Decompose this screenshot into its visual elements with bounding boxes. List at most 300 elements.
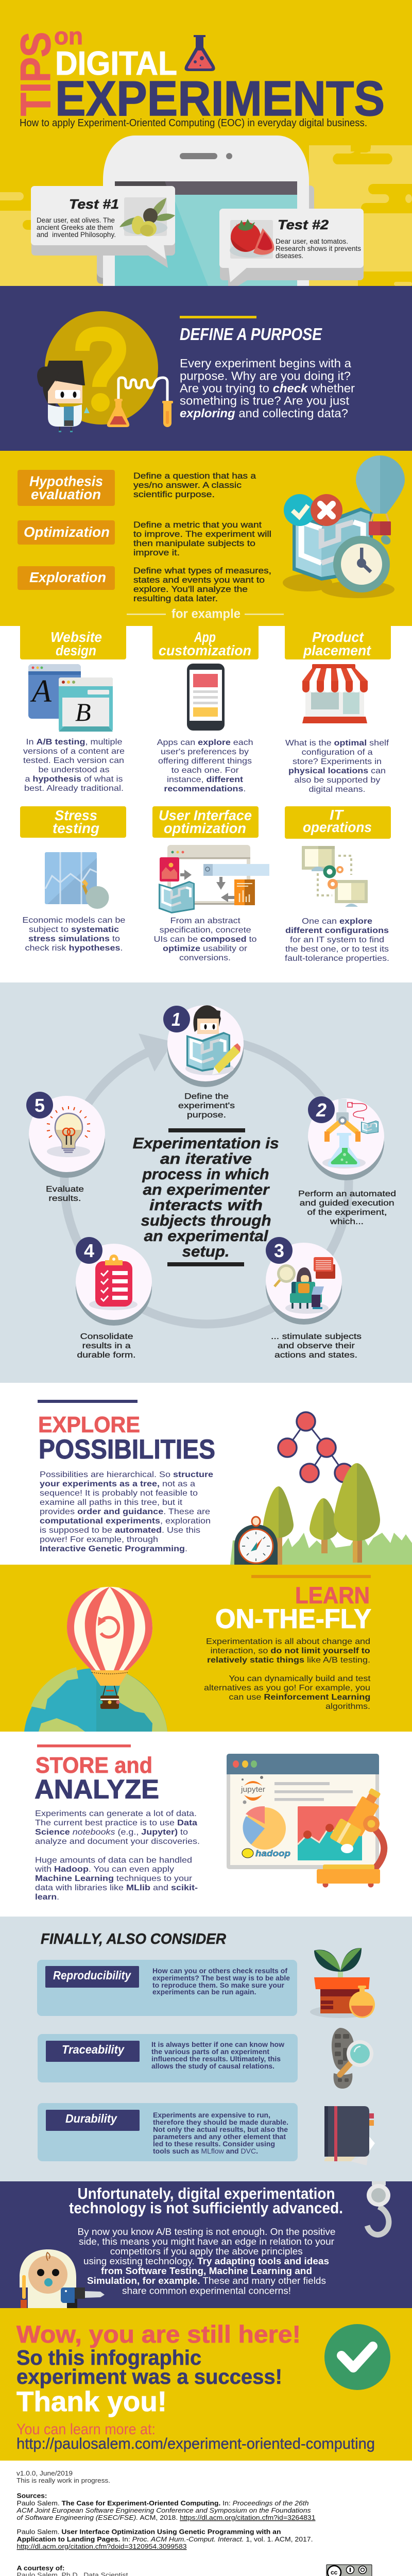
text: optimization: then manipulate subjects to xyxy=(133,538,255,548)
divider bar xyxy=(37,1744,131,1748)
body text: computational experiments , exploration xyxy=(40,1517,211,1526)
text xyxy=(23,738,125,793)
step 4 xyxy=(76,1237,152,1360)
body text: By now you know A/B testing is not enough. On the positive xyxy=(77,2227,336,2237)
title word: EXPERIMENTS: EXPERIMENTS xyxy=(55,71,385,126)
label: Perform an automated xyxy=(298,1190,396,1198)
text: subject to systematic xyxy=(29,925,119,934)
icon: networked monitors xyxy=(302,846,368,907)
body text: using existing technology. Try adapting tools and ideas xyxy=(83,2256,329,2266)
callout: Test 1 xyxy=(31,186,175,268)
label xyxy=(178,1092,235,1120)
heading xyxy=(215,1582,371,1634)
icon: phone xyxy=(187,664,225,731)
card: reproducibility: experiments? The best way is to be able xyxy=(152,1974,290,1982)
card: durability: parameters and any other element that xyxy=(153,2132,286,2141)
panel: explore possibilities xyxy=(0,1383,412,1565)
card: durability: Not only the actual results, but also the xyxy=(153,2125,288,2133)
illustration: glass tube xyxy=(118,378,167,401)
card: traceability: It is always better if one can know how xyxy=(151,2040,284,2048)
text: exploration xyxy=(133,566,271,603)
callout text: Dear user, eat tomatos. xyxy=(276,237,348,245)
subtitle: How to apply Experiment-Oriented Computing (EOC) in everyday digital business. xyxy=(20,117,367,129)
body text: with Hadoop . You can even apply xyxy=(35,1865,174,1874)
text: What is the optimal shelf xyxy=(285,739,389,748)
panel: header background xyxy=(0,0,412,286)
sources: ACM Joint European Software Engineering Conference and Symposium on the Foundations xyxy=(16,2506,311,2514)
panel: store and analyze xyxy=(0,1732,412,1917)
body text: purpose. Why are you doing it? xyxy=(180,369,351,382)
link block xyxy=(16,2421,375,2452)
heading card: User Interface xyxy=(159,807,252,823)
callout text: diseases. xyxy=(276,251,303,260)
heading card: optimization xyxy=(164,820,246,836)
panel: finally, also consider xyxy=(0,1917,412,2181)
logo: hadoop xyxy=(242,1849,290,1858)
illustration: smartphone xyxy=(97,135,314,286)
illustration: woman on armchair xyxy=(274,1257,335,1314)
panel: example: product placement xyxy=(285,626,391,794)
body text: from Software Testing, Machine Learning and xyxy=(101,2266,312,2276)
heading: technology is not sufficiently advanced. xyxy=(69,2199,343,2217)
license badge xyxy=(327,2565,372,2576)
version note: This is really work in progress. xyxy=(16,2477,110,2484)
heading card: customization xyxy=(159,642,251,658)
text: optimization xyxy=(133,520,271,557)
body text: The current best practice is to use Data xyxy=(35,1819,197,1827)
text: specification, concrete xyxy=(160,926,251,935)
heading: Unfortunately, digital experimentation xyxy=(77,2184,335,2202)
heading xyxy=(38,1412,215,1465)
body text: interaction, so do not limit yourself to xyxy=(211,1647,370,1655)
badge 2 xyxy=(308,1096,335,1123)
label: which... xyxy=(330,1217,364,1226)
text: instance, different xyxy=(167,775,244,784)
step 3 xyxy=(266,1237,362,1360)
heading: EXPLORE xyxy=(38,1412,140,1437)
panel: example: stress testing xyxy=(20,806,126,953)
text xyxy=(285,739,389,794)
icon: A/B windows xyxy=(28,664,113,732)
body text: Machine Learning techniques to your xyxy=(35,1874,193,1883)
panel: experiment cycle xyxy=(0,982,412,1383)
body text: alternatives as you go! For example, you xyxy=(204,1684,370,1692)
sources: Paulo Salem. User Interface Optimization Using Genetic Programming with an xyxy=(16,2528,281,2536)
logo: hadoop: hadoop xyxy=(255,1849,290,1858)
heading: DEFINE A PURPOSE xyxy=(180,325,322,344)
illustration: robot arm and flask xyxy=(322,1099,379,1168)
icon: plant and flask xyxy=(310,1948,375,2018)
label: ... stimulate subjects xyxy=(271,1332,362,1341)
body text: examine all paths in this tree, but it xyxy=(40,1498,183,1507)
card: traceability xyxy=(38,2034,298,2082)
illustration: map, balloon, stopwatch xyxy=(283,455,405,598)
callout heading: Test #1 xyxy=(69,196,119,212)
badge 1: 1 xyxy=(171,1009,181,1030)
divider bar xyxy=(180,316,256,318)
card: reproducibility xyxy=(37,1960,297,2016)
icon: flask xyxy=(184,35,215,71)
badge 3: 3 xyxy=(274,1240,284,1261)
credits: A courtesy of: xyxy=(16,2564,65,2572)
central statement: an experimenter xyxy=(143,1181,270,1198)
central statement: Experimentation is xyxy=(133,1135,279,1152)
central statement: process in which xyxy=(142,1166,269,1183)
panel: example: website design xyxy=(20,626,126,793)
label: purpose. xyxy=(187,1111,226,1120)
card: durability: Experiments are expensive to run, xyxy=(153,2111,270,2119)
heading card xyxy=(152,626,259,659)
illustration: clipboard xyxy=(89,1255,138,1310)
card: durability: Durability xyxy=(65,2112,117,2125)
text xyxy=(22,916,126,953)
heading card: operations xyxy=(303,819,372,835)
label: and guided execution xyxy=(300,1199,394,1208)
tag: exploration xyxy=(18,566,115,590)
text: physical locations can xyxy=(288,767,386,775)
logo: jupyter: jupyter xyxy=(241,1785,265,1794)
body text xyxy=(204,1637,371,1711)
link block: http://paulosalem.com/experiment-oriented-computing xyxy=(16,2435,375,2452)
title word: TIPS: TIPS xyxy=(12,32,59,116)
label: Consolidate xyxy=(80,1332,133,1341)
callout text: Dear user, eat olives. The xyxy=(37,216,115,224)
central statement xyxy=(133,1128,279,1266)
tag: exploration: Exploration xyxy=(29,569,106,585)
heading: ANALYZE xyxy=(35,1774,159,1804)
heading: STORE and xyxy=(36,1753,152,1778)
heading xyxy=(69,2184,343,2217)
text: exploration: explore. You'll analyze the xyxy=(133,584,248,594)
badge 4: 4 xyxy=(84,1240,94,1261)
icon: footprint and magnifier xyxy=(332,2028,373,2089)
card: durability: tools such as MLflow and DVC. xyxy=(153,2147,258,2155)
card: reproducibility: experiments can be run again. xyxy=(152,1988,256,1996)
badge 4 xyxy=(76,1237,102,1264)
text: In A/B testing , multiple xyxy=(26,738,123,747)
heading xyxy=(35,1753,159,1804)
body text: Huge amounts of data can be handled xyxy=(35,1856,192,1865)
tag: hypothesis evaluation: evaluation xyxy=(31,486,101,502)
version note xyxy=(16,2469,110,2484)
illustration: question mark circle xyxy=(45,311,158,425)
sources: Sources: xyxy=(16,2492,47,2500)
heading card: App xyxy=(194,629,216,645)
text: versions of a content are xyxy=(23,747,125,756)
icon: microscope xyxy=(317,1782,385,1888)
text: best. Already traditional. xyxy=(24,784,124,793)
text: fault-tolerance properties. xyxy=(285,954,389,963)
icon: store xyxy=(302,664,368,723)
text: to each one. For xyxy=(171,766,239,775)
text: offering different things xyxy=(158,757,252,766)
text: store? Experiments in xyxy=(293,757,382,766)
text: hypothesis: yes/no answer. A classic xyxy=(133,480,242,490)
heading: success xyxy=(16,2346,282,2388)
label xyxy=(77,1332,136,1360)
central statement: interacts with xyxy=(149,1197,263,1214)
panel: example: user interface optimization xyxy=(152,806,269,962)
heading card xyxy=(20,626,126,659)
link block: You can learn more at: xyxy=(16,2421,156,2438)
heading card: testing xyxy=(53,820,99,836)
heading card: design xyxy=(56,642,96,658)
body text: Simulation, for example. These and many other fields xyxy=(87,2276,326,2286)
illustration: hook xyxy=(367,2181,390,2235)
icon: success check xyxy=(324,2324,390,2390)
body text: Possibilities are hierarchical. So structure xyxy=(40,1470,213,1479)
title block xyxy=(12,23,385,129)
callout text xyxy=(37,216,116,239)
tag: optimization: Optimization xyxy=(24,524,110,540)
text: optimization: to improve. The experiment will xyxy=(133,529,271,539)
badge 5: 5 xyxy=(35,1095,45,1116)
panel: thank you xyxy=(0,2308,412,2461)
sources: of Software Engineering (ESEC/FSE). ACM, 2018. https://dl.acm.org/citation.cfm?id=3264831 xyxy=(16,2514,315,2521)
body text: learn. xyxy=(35,1893,59,1902)
body text: You can dynamically build and test xyxy=(229,1674,371,1683)
tag: optimization xyxy=(18,520,115,545)
text: Apps can explore each xyxy=(157,738,253,747)
label: results in a xyxy=(82,1342,131,1350)
icon: interface composition xyxy=(159,845,269,913)
tag: hypothesis evaluation xyxy=(18,470,115,506)
tag: hypothesis evaluation: Hypothesis xyxy=(29,473,103,489)
title word: DIGITAL: DIGITAL xyxy=(55,44,177,82)
badge 1 xyxy=(163,1006,190,1032)
badge 2: 2 xyxy=(316,1099,327,1121)
text: optimization: Define a metric that you want xyxy=(133,520,262,530)
text: for an IT system to find xyxy=(290,936,384,944)
card: traceability: influenced the results. Ultimately, this xyxy=(151,2055,281,2063)
body text: side, this means you might have an edge in relation to your xyxy=(79,2236,334,2247)
label: of the experiment, xyxy=(307,1208,387,1217)
badge 3 xyxy=(266,1237,293,1264)
illustration: globe xyxy=(24,1667,167,1732)
text: optimize usability or xyxy=(163,944,248,953)
text: hypothesis: Define a question that has a xyxy=(133,471,256,481)
credits xyxy=(16,2564,128,2576)
card: traceability: the various parts of an experiment xyxy=(151,2047,269,2056)
sources xyxy=(16,2492,316,2550)
badge 5 xyxy=(26,1092,53,1118)
callout text: and invented Philosophy. xyxy=(37,230,116,239)
body text: exploring and collecting data? xyxy=(180,406,348,420)
card: reproducibility: Reproducibility xyxy=(53,1969,131,1982)
heading card xyxy=(152,806,259,838)
panel: footer xyxy=(16,2469,385,2576)
icon: chart and magnifier xyxy=(45,852,109,909)
heading card: Website xyxy=(50,629,102,645)
sources: Paulo Salem. The Case for Experiment-Oriented Computing. In: Proceedings of the 26th xyxy=(16,2499,309,2507)
body text: is supposed to be automated . Use this xyxy=(40,1526,200,1535)
label: results. xyxy=(48,1194,81,1203)
body text: data with libraries like MLlib and scikit- xyxy=(35,1884,198,1892)
heading card xyxy=(285,626,391,659)
panel: not sufficiently advanced xyxy=(0,2181,412,2308)
heading: FINALLY, ALSO CONSIDER xyxy=(41,1931,226,1947)
text: the best one, or to test its xyxy=(285,945,389,954)
illustration: test tube xyxy=(162,401,173,427)
label: Evaluate xyxy=(46,1185,84,1194)
body text: Are you trying to check whether xyxy=(180,381,355,395)
text: user's preferences by xyxy=(161,748,249,756)
step 5 xyxy=(26,1092,105,1203)
body text: relatively static things like A/B testing. xyxy=(207,1656,370,1665)
illustration: light bulb xyxy=(47,1106,90,1157)
body text: can use Reinforcement Learning xyxy=(229,1693,370,1702)
panel: example: IT operations xyxy=(285,806,391,963)
body text xyxy=(180,357,355,420)
heading: thank you: Thank you! xyxy=(16,2385,167,2417)
text: hypothesis: scientific purpose. xyxy=(133,489,215,499)
callout heading: Test #2 xyxy=(278,217,329,232)
central statement: subjects through xyxy=(141,1212,271,1229)
card: traceability: allows the study of causal relations. xyxy=(151,2062,274,2070)
body text: something is true? Are you just xyxy=(180,394,350,407)
icon: notebook xyxy=(324,2106,375,2165)
body text: Science notebooks (e.g., Jupyter) to xyxy=(35,1828,188,1837)
card: traceability: Traceability xyxy=(62,2043,125,2056)
heading: ON-THE-FLY xyxy=(215,1604,371,1634)
illustration: baby with tools xyxy=(20,2249,105,2308)
text: be understood as xyxy=(38,766,109,774)
callout: Test 2 xyxy=(219,209,364,286)
body text xyxy=(40,1470,213,1553)
label: actions and states. xyxy=(274,1351,357,1360)
step 2 xyxy=(298,1096,396,1226)
text: optimization: improve it. xyxy=(133,548,180,557)
heading card: placement xyxy=(303,642,372,658)
version note: v1.0.0, June/2019 xyxy=(16,2469,73,2477)
text: stress simulations to xyxy=(28,935,120,943)
illustration: forest and compass xyxy=(230,1463,412,1565)
text: exploration: states and events you want to xyxy=(133,575,265,585)
illustration: flask xyxy=(107,399,129,427)
central statement: setup. xyxy=(182,1243,230,1260)
area chart xyxy=(298,1806,362,1860)
pie chart xyxy=(243,1806,286,1850)
body text: Interactive Genetic Programming . xyxy=(40,1545,187,1553)
panel: example: app customization xyxy=(152,626,259,793)
sources: Application to Landing Pages. In: Proc. ACM Hum.-Comput. Interact. 1, vol. 1. ACM, 2017. xyxy=(16,2535,313,2543)
body text: power! For example, through xyxy=(40,1535,158,1544)
text: exploration: resulting data later. xyxy=(133,594,218,603)
text: One can explore xyxy=(302,917,372,926)
text: different configurations xyxy=(285,926,389,935)
text: recommendations . xyxy=(164,785,246,793)
label xyxy=(46,1185,84,1203)
body text: share common experimental concerns! xyxy=(122,2285,291,2296)
icon: A/B windows: A xyxy=(30,674,52,709)
panel: purposes xyxy=(0,451,412,626)
body text: provides order and guidance . These are xyxy=(40,1507,210,1516)
illustration: hot air balloon xyxy=(67,1587,152,1709)
icon: tomatoes xyxy=(230,219,274,259)
central statement: an iterative xyxy=(160,1150,252,1167)
card: durability: therefore they should be made durable. xyxy=(153,2118,288,2126)
license badge: cc xyxy=(331,2569,338,2576)
label: experiment's xyxy=(178,1101,235,1110)
text: also be supported by xyxy=(294,776,380,785)
callout text: Research shows it prevents xyxy=(276,244,361,252)
card: durability: led to these results. Consider using xyxy=(153,2140,275,2148)
body text: Experimentation is all about change and xyxy=(206,1637,370,1646)
heading: POSSIBILITIES xyxy=(39,1434,215,1465)
body text: Experiments can generate a lot of data. xyxy=(35,1809,197,1818)
label xyxy=(271,1332,362,1360)
label: Define the xyxy=(184,1092,229,1101)
card: reproducibility: to reproduce them. So make sure your xyxy=(152,1981,285,1989)
divider bar xyxy=(38,1400,138,1403)
logo: jupyter xyxy=(241,1776,265,1804)
label: for example: for example xyxy=(171,607,241,621)
sources: http://dl.acm.org/citation.cfm?doid=3120954.3099583 xyxy=(16,2543,187,2550)
text xyxy=(285,917,389,963)
card: reproducibility: How can you or others check results of xyxy=(152,1967,287,1975)
cycle ring xyxy=(64,1040,349,1324)
card: durability xyxy=(38,2103,298,2161)
text: Economic models can be xyxy=(22,916,126,925)
body text: algorithms. xyxy=(325,1702,370,1711)
text: exploration: Define what types of measures, xyxy=(133,566,271,575)
heading card xyxy=(285,806,391,839)
central statement: an experimental xyxy=(144,1228,268,1245)
label xyxy=(298,1190,396,1226)
illustration: boy with map xyxy=(186,1005,241,1075)
heading card xyxy=(20,806,126,838)
text: UIs can be composed to xyxy=(153,935,257,944)
heading: success: So this infographic xyxy=(16,2346,201,2369)
body text: sequence! It is probably not feasible to xyxy=(40,1489,198,1498)
callout text xyxy=(276,237,361,260)
body text xyxy=(35,1809,200,1902)
illustration: scientist xyxy=(37,361,90,432)
body text: analyze and document your discoveries. xyxy=(35,1837,200,1846)
illustration: notebook window xyxy=(227,1754,385,1888)
text: hypothesis xyxy=(133,471,256,499)
text xyxy=(153,917,257,962)
text: digital means. xyxy=(309,785,366,794)
divider bar xyxy=(251,1575,371,1578)
icon: A/B windows: B xyxy=(75,698,91,726)
heading card: Product xyxy=(312,629,365,645)
body text: your experiments as a tree, not as a xyxy=(40,1480,195,1488)
illustration: tree diagram xyxy=(278,1412,353,1482)
text: From an abstract xyxy=(170,917,241,925)
text xyxy=(157,738,253,793)
heading card: Stress xyxy=(55,807,97,823)
heading: LEARN xyxy=(295,1582,370,1608)
text: check risk hypotheses . xyxy=(25,944,123,953)
heading: success: experiment was a success! xyxy=(16,2365,282,2388)
panel: define a purpose xyxy=(0,286,412,451)
panel: learn on-the-fly xyxy=(0,1565,412,1732)
text: tested. Each version can xyxy=(23,756,124,765)
body text xyxy=(77,2227,336,2296)
heading: wow: Wow, you are still here! xyxy=(16,2320,301,2348)
text: a hypothesis of what is xyxy=(25,775,123,784)
icon: olives xyxy=(119,197,175,236)
title word: on: on xyxy=(54,23,83,49)
callout text: ancient Greeks ate them xyxy=(37,223,113,231)
text: conversions. xyxy=(179,954,231,962)
body text: Every experiment begins with a xyxy=(180,357,351,370)
label: durable form. xyxy=(77,1351,136,1360)
heading card: IT xyxy=(330,807,345,823)
arrowhead xyxy=(139,1033,173,1072)
body text: competitors if you apply the above principles xyxy=(110,2246,303,2257)
